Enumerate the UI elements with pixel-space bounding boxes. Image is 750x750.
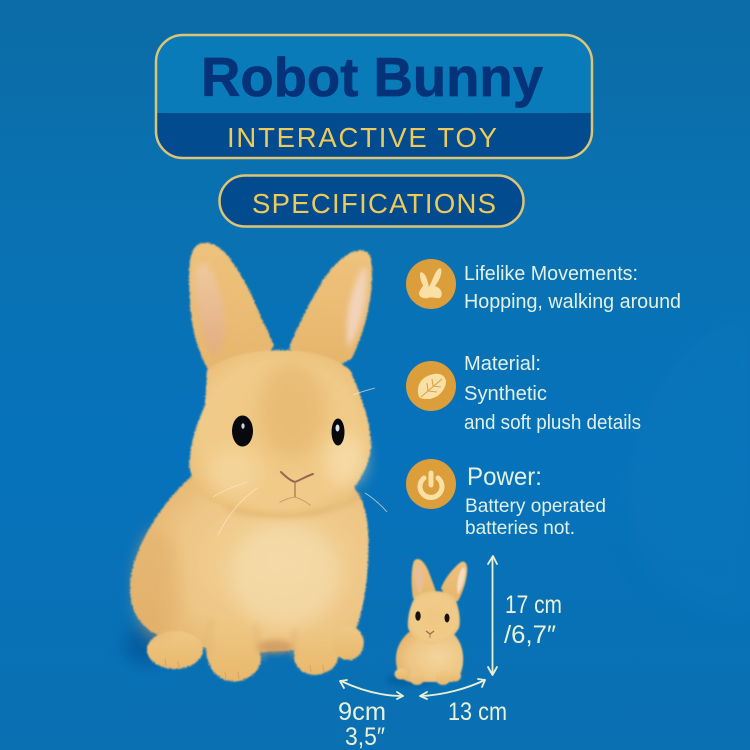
header panel — [156, 35, 592, 158]
ground shadow — [124, 625, 172, 665]
text: lifelike movements: Hopping, walking around — [464, 291, 681, 313]
feature: power — [406, 459, 610, 539]
text: material: Synthetic — [464, 383, 547, 405]
specifications heading — [220, 176, 524, 226]
dimension label: depth: 9cm — [338, 698, 386, 726]
left flank shading — [136, 530, 180, 640]
toes — [165, 659, 324, 679]
icon: bunny badge — [406, 259, 456, 309]
dimension arrow: height — [488, 556, 497, 675]
specifications heading: SPECIFICATIONS — [252, 188, 496, 219]
feature: lifelike movements — [406, 259, 681, 313]
body — [130, 470, 368, 652]
feature: material — [406, 353, 641, 434]
title: Robot Bunny — [201, 46, 543, 108]
whiskers — [213, 388, 387, 535]
left eye — [232, 416, 253, 446]
nose and mouth — [280, 472, 313, 505]
inner right ear — [347, 268, 367, 348]
text: material: and soft plush details — [464, 412, 641, 434]
feet — [147, 631, 203, 669]
right eye — [332, 418, 344, 446]
neck shadow — [225, 495, 360, 516]
forehead shading — [258, 362, 326, 458]
subtitle: INTERACTIVE TOY — [227, 122, 497, 153]
dimension label: width: 13 cm — [448, 698, 507, 726]
text: power: batteries not. — [465, 517, 575, 539]
text: power: Power: — [467, 463, 542, 491]
icon: power badge — [406, 459, 456, 509]
dimension arrow: width — [420, 679, 485, 699]
right ear — [289, 250, 372, 365]
cheek highlight — [325, 434, 365, 486]
text: lifelike movements: Lifelike Movements: — [464, 263, 638, 285]
dimension label: height: /6,7″ — [504, 621, 556, 649]
left ear — [189, 243, 274, 376]
head — [189, 350, 371, 518]
inner left ear — [195, 263, 225, 356]
large bunny illustration — [124, 243, 387, 681]
belly shadow between legs — [257, 640, 293, 654]
fur body parts — [130, 243, 372, 681]
dimension arrow: depth — [340, 680, 403, 699]
dimension label: height: 17 cm — [505, 591, 562, 619]
text: power: Battery operated — [465, 495, 606, 517]
small bunny illustration — [386, 559, 467, 686]
text: material: Material: — [464, 353, 541, 375]
chest highlight — [230, 523, 340, 627]
leg shading — [209, 620, 295, 660]
icon: leaf badge — [406, 361, 456, 411]
